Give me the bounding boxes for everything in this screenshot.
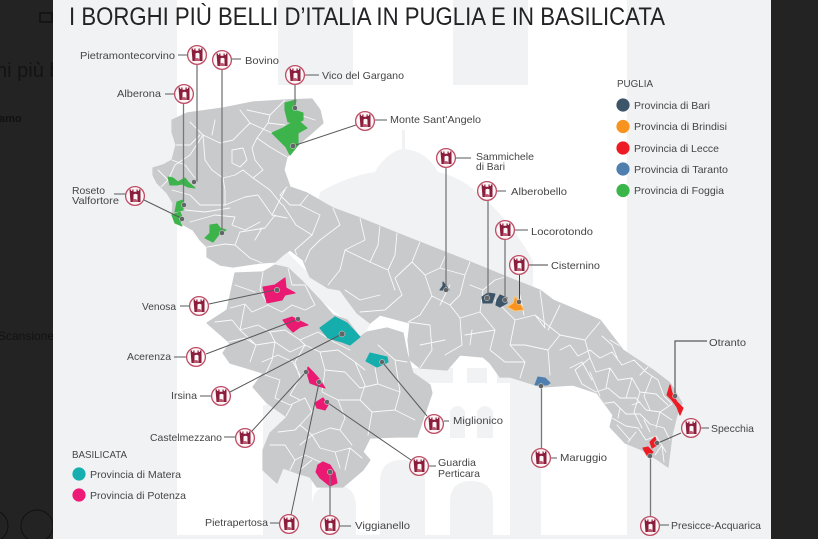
village: Vico del Gargano: Vico del Gargano [322,70,404,82]
village: Venosa: Venosa [142,301,176,313]
village: Pietrapertosa: Pietrapertosa [205,517,268,529]
village: Presicce-Acquarica: Presicce-Acquarica [671,520,761,532]
Locorotondo area [496,295,507,307]
legend: Puglia: Provincia di Brindisi [634,121,727,133]
village: Alberobello [478,182,567,301]
village: Sammichele di Bari: di Bari [476,161,505,173]
legend: Basilicata: BASILICATA [72,450,127,461]
Alberona area [175,200,183,212]
village: Roseto Valfortore: Roseto [72,185,105,197]
legend: Puglia: PUGLIA [617,79,653,90]
village: Alberona [117,85,193,208]
region: Basilicata [207,265,432,487]
legend: Puglia: Provincia di Foggia [634,185,724,197]
village: Cisternino: Cisternino [551,260,600,272]
village: Guardia Perticara [324,400,480,480]
village: Pietramontecorvino [80,46,206,184]
village: Monte Sant'Angelo [290,112,481,149]
Venosa area [263,278,295,303]
village: Guardia Perticara: Perticara [438,468,480,480]
legend: Puglia [616,79,728,197]
village: Otranto: Otranto [709,337,746,349]
Pietramontecorvino area [168,177,195,188]
village: Roseto Valfortore: Valfortore [72,195,119,207]
village: Specchia [654,419,754,446]
village: Specchia: Specchia [711,423,754,435]
Vico del Gargano area [285,100,303,123]
Sammichele area [440,282,449,290]
legend: Basilicata: Provincia di Potenza [90,490,186,502]
region: Puglia [153,99,682,467]
province areas [168,100,683,486]
village: Locorotondo: Locorotondo [531,226,593,238]
village: Bovino [213,51,279,235]
Viggianello area [316,462,337,486]
village: Viggianello [321,469,410,534]
Specchia area [650,437,657,448]
village: Otranto [672,337,746,398]
legend: Puglia: Provincia di Taranto [634,164,728,176]
village: Maruggio [532,384,607,467]
boundaries: Basilicata [215,268,415,470]
Guardia Perticara area [315,398,328,410]
legend: Basilicata [72,450,186,502]
village: Miglionico [380,360,503,433]
village: Miglionico: Miglionico [453,415,503,427]
legend: Puglia: Provincia di Bari [634,100,710,112]
Irsina area [320,317,360,345]
Maruggio area [535,377,550,385]
Presicce-Acquarica area [643,447,653,457]
village: Vico del Gargano [286,66,404,110]
background: white castle silhouette [177,0,627,535]
village: Venosa [142,287,280,315]
village: Sammichele di Bari: Sammichele [476,151,534,163]
village: Castelmezzano: Castelmezzano [150,432,222,444]
village: Acerenza: Acerenza [127,351,171,363]
village: Cisternino [510,256,600,304]
boundaries: Bari and Murge [280,187,600,384]
Miglionico area [366,353,388,367]
village: Castelmezzano [150,370,308,447]
boundaries: Foggia [158,100,315,263]
village: Bovino: Bovino [245,55,279,67]
village: Alberobello: Alberobello [511,186,567,198]
village: Pietramontecorvino: Pietramontecorvino [80,50,175,62]
boundaries: Salento [560,335,672,462]
legend: Puglia: Provincia di Lecce [634,143,719,155]
village: Presicce-Acquarica [641,454,761,535]
village: Alberona: Alberona [117,88,161,100]
legend: Basilicata: Provincia di Matera [90,469,181,481]
Castelmezzano and Pietrapertosa area [307,367,325,388]
Cisternino area [507,296,524,311]
village: Roseto Valfortore [72,185,184,222]
village: Acerenza [127,316,300,366]
village: Locorotondo [496,221,593,302]
Alberobello area [482,293,495,303]
Monte Sant'Angelo area [272,122,307,155]
title: I BORGHI PIÙ BELLI D’ITALIA IN PUGLIA E IN BASILICATA [69,2,665,31]
village: Irsina: Irsina [171,390,197,402]
Acerenza area [283,317,308,332]
village: Irsina [171,331,345,405]
village: Viggianello: Viggianello [355,520,410,532]
Bovino area [205,224,226,242]
municipal boundaries [158,100,672,470]
village: Sammichele di Bari [437,149,534,292]
map: Puglia and Basilicata municipalities [153,99,682,487]
village: Guardia Perticara: Guardia [438,457,476,469]
village: Monte Sant'Angelo: Monte Sant’Angelo [390,114,481,126]
Roseto Valfortore area [172,212,182,226]
Otranto area [667,385,683,415]
village: Maruggio: Maruggio [560,452,607,464]
village: Pietrapertosa [205,380,322,533]
